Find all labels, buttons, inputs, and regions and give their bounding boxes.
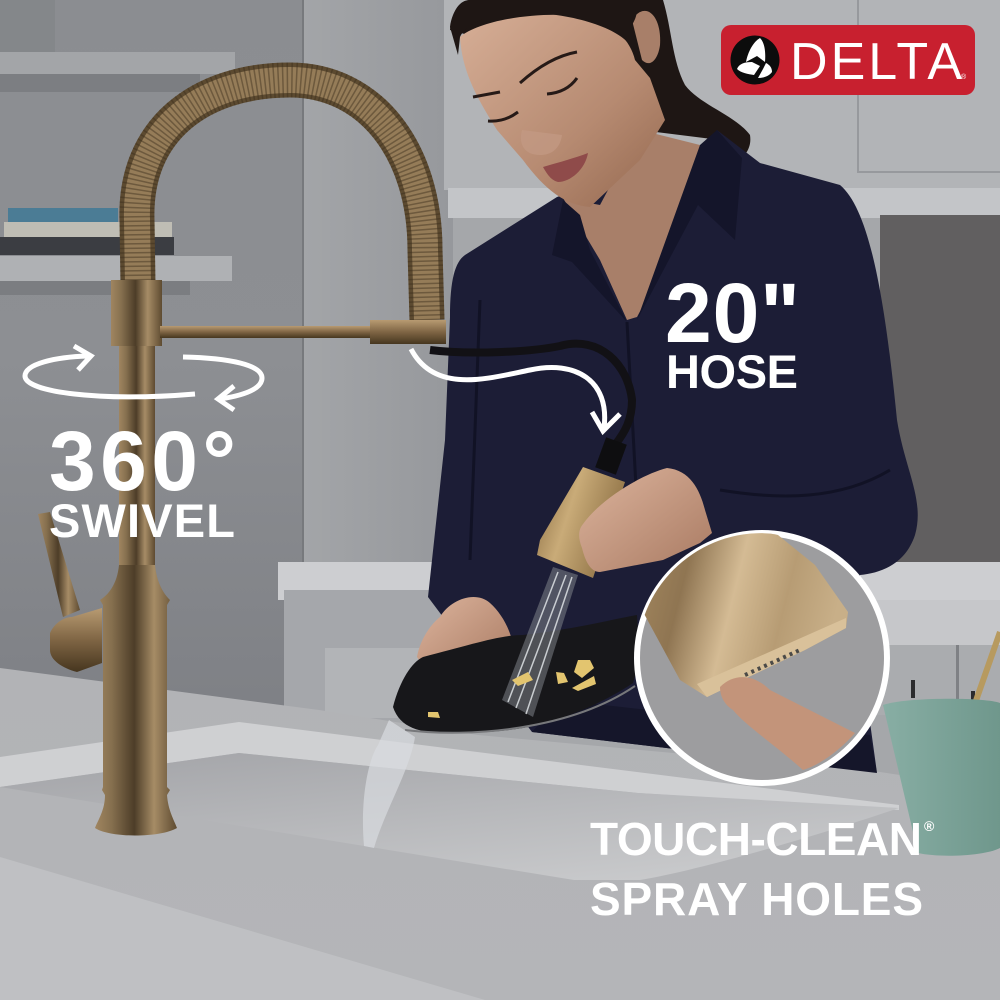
spray head xyxy=(537,437,712,578)
spray holes xyxy=(745,650,800,675)
faucet xyxy=(38,80,446,836)
label: touch-clean spray holes: TOUCH-CLEAN xyxy=(590,813,922,865)
left hand under plate xyxy=(417,597,512,675)
shirt collar xyxy=(552,130,742,322)
swivel arrows xyxy=(25,346,262,410)
eyes and brows xyxy=(473,52,577,121)
counter front edge xyxy=(0,857,485,1000)
gripping hand xyxy=(579,468,712,572)
hair back and ponytail xyxy=(450,0,750,160)
lips xyxy=(543,153,588,182)
woman xyxy=(417,0,918,773)
label: 20 inch hose: 20" xyxy=(665,266,800,360)
sink rim xyxy=(0,722,899,810)
shirt folds xyxy=(470,300,890,560)
label: touch-clean spray holes: SPRAY HOLES xyxy=(590,873,923,925)
support arm xyxy=(160,326,385,338)
chest and neck xyxy=(563,130,710,320)
food scraps xyxy=(428,660,596,718)
torso and shirt xyxy=(428,130,918,773)
plate with water and food xyxy=(393,567,640,733)
plate rim highlight xyxy=(405,686,635,733)
stem xyxy=(119,340,155,570)
hair front xyxy=(450,0,637,55)
front counter xyxy=(0,668,1000,1000)
detail circle: spray holes xyxy=(634,530,890,786)
hose arrow xyxy=(411,349,620,431)
label: touch-clean spray holes: ® xyxy=(924,818,935,834)
shirt strip behind counter xyxy=(532,700,877,773)
cup with straw xyxy=(883,632,1000,856)
label: touch-clean spray holes xyxy=(590,813,935,925)
brass spray head close-up xyxy=(642,533,848,697)
label: 20 inch hose: HOSE xyxy=(666,345,798,398)
handle cap xyxy=(50,608,102,672)
finger xyxy=(720,677,855,770)
wall shelves with books xyxy=(0,0,235,295)
label: 360 swivel: SWIVEL xyxy=(49,494,235,547)
body and base xyxy=(95,565,177,836)
spray of water xyxy=(502,567,578,717)
sink basin xyxy=(0,753,899,880)
handle lever xyxy=(38,512,80,617)
coiled arc xyxy=(137,80,427,320)
water stream xyxy=(363,720,415,848)
face xyxy=(460,15,665,207)
label: 360 swivel: 360° xyxy=(49,414,236,508)
upper cabinets xyxy=(444,0,1000,575)
back counter and lower cabinets xyxy=(278,562,1000,720)
Delta logo xyxy=(721,25,975,95)
ear xyxy=(632,11,660,63)
Delta logo: ® xyxy=(961,73,967,81)
nose shade xyxy=(521,130,562,155)
hose xyxy=(430,344,632,445)
Delta logo: DELTA xyxy=(790,33,962,91)
